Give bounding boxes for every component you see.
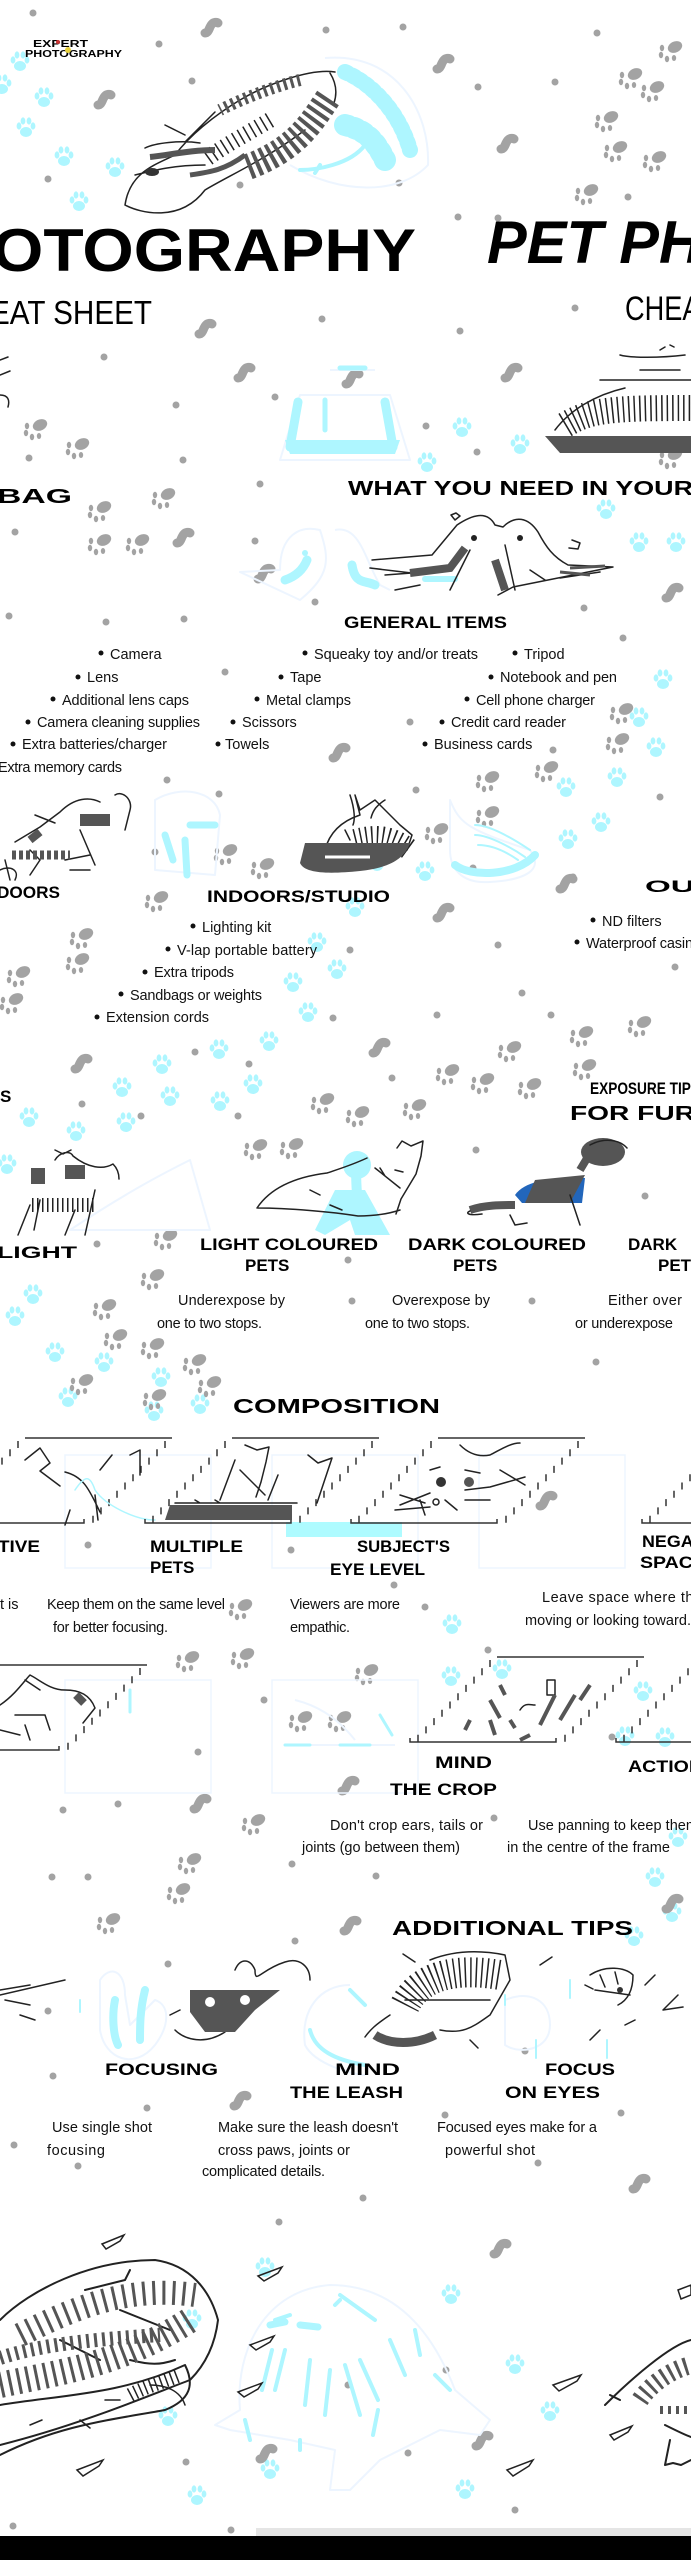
illustration: light pets ghost [70, 1160, 210, 1230]
illustration: focusing dog [170, 1961, 310, 2040]
photo frame: multiple pets [145, 1438, 379, 1523]
logo: EXPERT [33, 38, 89, 50]
footer bar [0, 2536, 691, 2560]
list: indoors: V-lap portable battery [177, 943, 318, 959]
illustration: food bowl, line art [0, 345, 691, 453]
ghost photo frames [65, 1455, 625, 1793]
labels: additional tips: FOCUS [545, 2060, 615, 2079]
labels: composition row 1: SUBJECT'S [357, 1537, 450, 1556]
list: accessories: Business cards [434, 737, 532, 753]
illustration: outdoor dog [0, 794, 131, 880]
body: additional tips: focusing [47, 2143, 105, 2159]
body: additional tips: complicated details. [202, 2164, 325, 2180]
illustration: eye focus cat [80, 1968, 683, 2058]
list: indoors: Lighting kit [202, 920, 271, 936]
heading: additional tips: ADDITIONAL TIPS [392, 1918, 633, 1940]
illustration: budgies, ghost [240, 529, 455, 600]
body: composition row 1: Keep them on the same level [47, 1597, 225, 1613]
illustration: leash cat [365, 1952, 552, 2048]
list: indoors: Extension cords [106, 1010, 209, 1026]
list: accessories: Tripod [524, 647, 565, 663]
body: composition row 2: in the centre of the frame [507, 1840, 670, 1856]
illustration: outdoor dog, ghost [155, 792, 220, 875]
list: general items [216, 647, 478, 753]
labels: exposure: LIGHT COLOURED [200, 1235, 378, 1254]
body: light pets exposure [157, 1293, 286, 1332]
body: composition row 2: joints (go between them) [301, 1840, 460, 1856]
photo frame: action [616, 1657, 691, 1742]
list: accessories [422, 647, 617, 753]
list: general items: Tape [290, 670, 321, 686]
body: additional tips [47, 2120, 598, 2180]
subheading: outdoors: OUT [645, 877, 691, 896]
subheading: outdoors [0, 877, 691, 902]
labels: composition row 2: MIND [435, 1753, 492, 1772]
body: composition row 1: t is [0, 1597, 19, 1613]
title [0, 209, 691, 284]
labels: composition row 1 [0, 1532, 691, 1579]
photo frame: mind the crop [410, 1657, 644, 1742]
list: camera gear: Camera [110, 647, 163, 663]
labels: exposure: DARK COLOURED [408, 1235, 586, 1254]
illustration: left wrap cat [0, 1980, 65, 2020]
illustration: budgies, line art [370, 513, 613, 595]
illustration: turtle, ghost [215, 2285, 490, 2490]
illustration: dark dog [468, 1138, 627, 1225]
list: general items: Scissors [242, 715, 297, 731]
body: composition row 2: Don't crop ears, tails or [330, 1818, 483, 1834]
labels: additional tips: FOCUSING [105, 2060, 218, 2079]
illustration: turtle, line art left [0, 2260, 218, 2455]
labels: composition row 1: MULTIPLE [150, 1537, 243, 1556]
labels: exposure: PETS [453, 1256, 497, 1275]
list: camera gear: Extra memory cards [0, 760, 122, 776]
heading: what you need [0, 478, 691, 508]
body: composition row 2 [301, 1818, 691, 1856]
labels: exposure: PETS [245, 1256, 289, 1275]
footer hatch strip [256, 2528, 691, 2536]
body: dark pets exposure [365, 1293, 491, 1332]
photo frame: negative space right [642, 1438, 691, 1523]
heading: composition: COMPOSITION [233, 1396, 440, 1418]
labels: exposure: DARK [628, 1235, 678, 1254]
body: additional tips: powerful shot [445, 2143, 535, 2159]
body: additional tips: Make sure the leash doesn't [218, 2120, 398, 2136]
labels: additional tips [105, 2060, 615, 2102]
body: mixed pets exposure: or underexpose [575, 1316, 673, 1332]
list: indoors: Sandbags or weights [130, 988, 262, 1004]
labels: additional tips: THE LEASH [290, 2083, 403, 2102]
heading: exposure tips: S [0, 1087, 11, 1106]
photo frame: eye level [351, 1438, 585, 1523]
list: accessories: Notebook and pen [500, 670, 617, 686]
body: dark pets exposure: Overexpose by [392, 1293, 491, 1309]
list: camera gear: Extra batteries/charger [22, 737, 167, 753]
illustration: fluffy light cat [257, 1141, 423, 1235]
heading: what you need: WHAT YOU NEED IN YOUR [348, 478, 691, 500]
labels: composition row 2: THE CROP [390, 1780, 497, 1799]
body: light pets exposure: one to two stops. [157, 1316, 262, 1332]
small scattered turtle marks [77, 2235, 691, 2476]
photo frame: horse-like pet [0, 1665, 147, 1750]
illustration: dog standing [18, 1150, 119, 1235]
body: mixed pets exposure: Either over [608, 1293, 682, 1309]
body: composition row 1: empathic. [290, 1620, 350, 1636]
body: composition row 1: moving or looking toward. [525, 1613, 691, 1629]
illustration: ghost focusing dog [100, 1972, 166, 2059]
body: light pets exposure: Underexpose by [178, 1293, 286, 1309]
labels: exposure [0, 1235, 691, 1275]
labels: composition row 2 [390, 1753, 691, 1799]
body: dark pets exposure: one to two stops. [365, 1316, 470, 1332]
logo [25, 38, 122, 60]
list: general items: Towels [225, 737, 269, 753]
illustration: leash, ghost [304, 1985, 365, 2075]
list: camera gear: Camera cleaning supplies [37, 715, 200, 731]
list: general items: Squeaky toy and/or treats [314, 647, 478, 663]
list: general items: Metal clamps [266, 693, 351, 709]
illustration: cat in a basket [300, 795, 412, 873]
heading: exposure tips: FOR FUR [570, 1103, 691, 1125]
illustration: sleeping cat line art [125, 71, 336, 213]
illustration: sleeping cat cyan half [290, 58, 428, 188]
body: additional tips: Use single shot [52, 2120, 152, 2136]
cyan caption bar [286, 1522, 402, 1537]
list: accessories: Credit card reader [451, 715, 566, 731]
labels: composition row 1: PETS [150, 1558, 194, 1577]
list: indoors [94, 920, 318, 1026]
list: indoors: Extra tripods [154, 965, 234, 981]
subtitle [0, 290, 691, 331]
body: composition row 1: Viewers are more [290, 1597, 400, 1613]
list: camera gear: Lens [87, 670, 118, 686]
illustration: ghost cat in frame [130, 1690, 395, 1745]
title: OTOGRAPHY [0, 217, 416, 284]
photo frame: negative space left [0, 1438, 172, 1525]
list: camera gear: Additional lens caps [62, 693, 189, 709]
illustration: food bowl, ghost [280, 368, 410, 460]
background: grey paw prints [0, 39, 684, 1934]
labels: additional tips: ON EYES [505, 2083, 600, 2102]
list: camera gear [0, 647, 200, 776]
illustration: cat in a basket, ghost [450, 800, 535, 882]
list: outdoors [574, 914, 691, 952]
heading: exposure tips [0, 1079, 691, 1125]
subheading: indoors/studio: INDOORS/STUDIO [207, 887, 390, 906]
subheading: general items: GENERAL ITEMS [344, 613, 507, 632]
body: composition row 1 [0, 1590, 691, 1636]
list: accessories: Cell phone charger [476, 693, 595, 709]
body: mixed pets exposure [575, 1293, 682, 1332]
body: composition row 1: for better focusing. [53, 1620, 168, 1636]
labels: composition row 1: EYE LEVEL [330, 1560, 425, 1579]
labels: additional tips: MIND [335, 2060, 400, 2079]
body: additional tips: Focused eyes make for a [437, 2120, 598, 2136]
logo: PHOTOGRAPHY [25, 48, 122, 60]
body: additional tips: cross paws, joints or [218, 2143, 350, 2159]
list: outdoors: ND filters [602, 914, 662, 930]
illustration: turtle, line art right [605, 2340, 691, 2465]
